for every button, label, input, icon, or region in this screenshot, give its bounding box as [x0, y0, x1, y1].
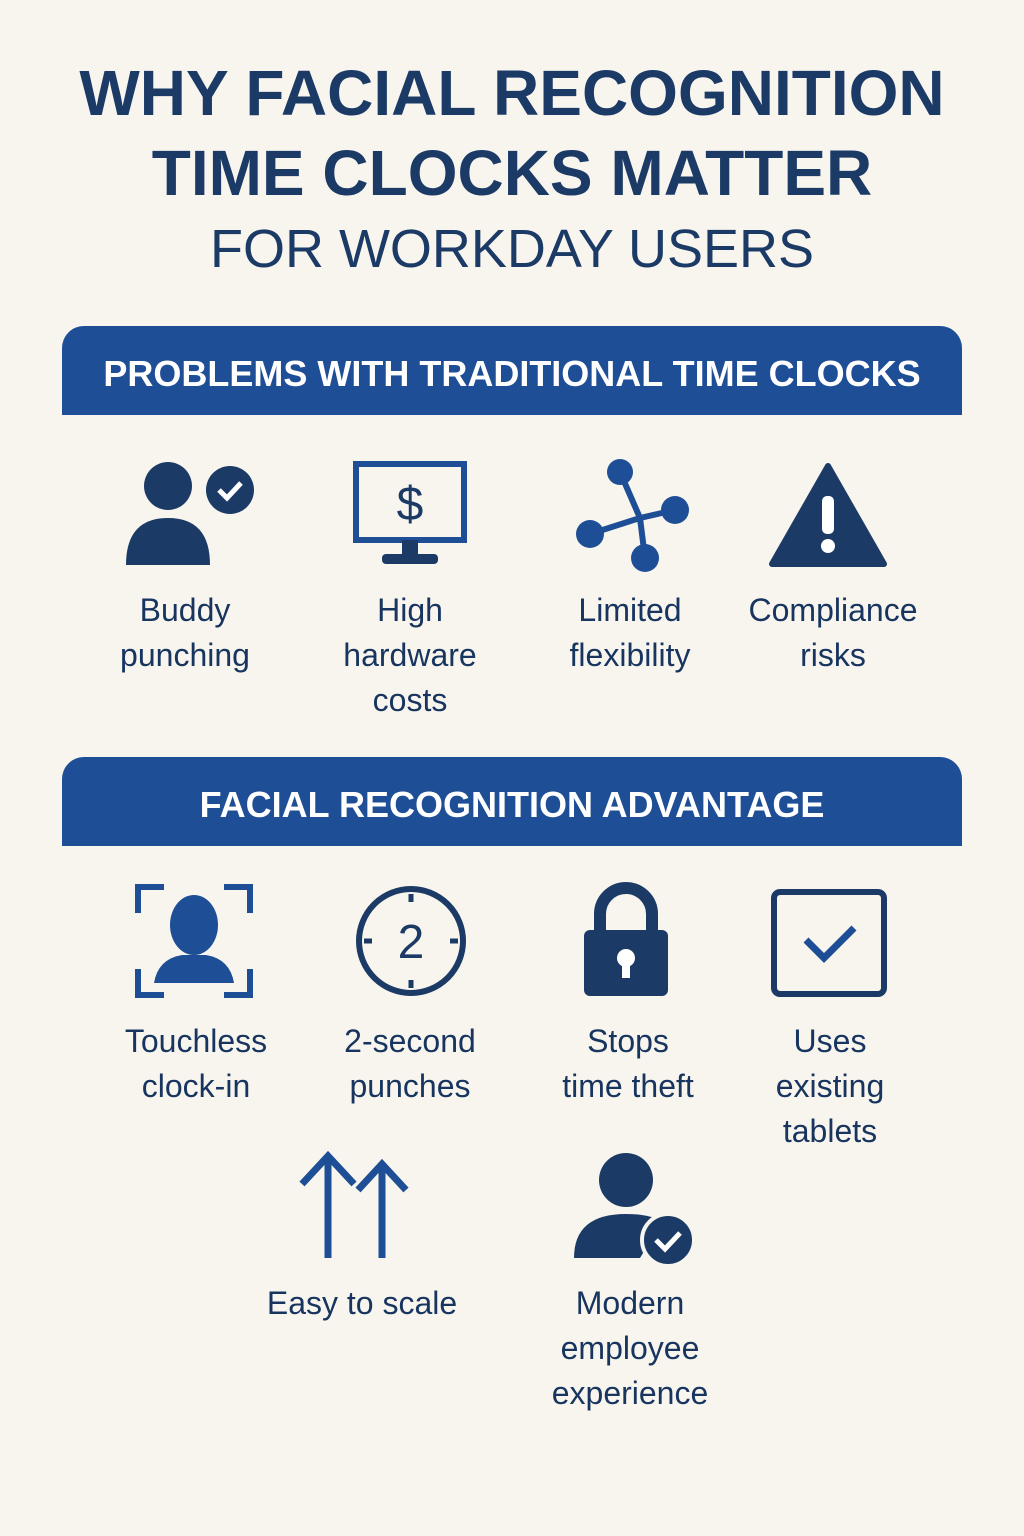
- icon: warning: [769, 463, 887, 567]
- label: existing tablets: existing: [776, 1068, 884, 1104]
- label: limited flexibility: [570, 592, 690, 673]
- label: time theft: Stops: [587, 1023, 669, 1059]
- label: 2-second: [344, 1023, 476, 1104]
- label: existing tablets: [776, 1023, 884, 1149]
- icon: checkbox: [771, 889, 887, 997]
- banner: advantage: [62, 757, 962, 846]
- label: time theft: time theft: [562, 1068, 694, 1104]
- banner: problems: [62, 326, 962, 415]
- label: 2-second: punches: [350, 1068, 470, 1104]
- label: 2-second: 2-second: [344, 1023, 476, 1059]
- icon: person check: [574, 1153, 692, 1264]
- title: TIME CLOCKS MATTER: [152, 137, 872, 209]
- label: existing tablets: Uses: [794, 1023, 866, 1059]
- label: buddy punching: Buddy: [140, 592, 230, 628]
- label: employee experience: experience: [552, 1375, 708, 1411]
- label: buddy punching: [120, 592, 250, 673]
- label: existing tablets: tablets: [783, 1113, 877, 1149]
- icon: timer: [356, 886, 466, 996]
- label: time theft: [562, 1023, 694, 1104]
- banner: problems: PROBLEMS WITH TRADITIONAL TIME CLOCKS: [103, 353, 921, 394]
- label: touchless: clock-in: [142, 1068, 250, 1104]
- icon: hardware costs: $: [397, 478, 423, 531]
- title: [79, 57, 945, 209]
- title: WHY FACIAL RECOGNITION: [79, 57, 945, 129]
- label: employee experience: employee: [561, 1330, 699, 1366]
- label: touchless: Touchless: [125, 1023, 267, 1059]
- label: hardware costs: [343, 592, 477, 718]
- label: compliance risks: [749, 592, 917, 673]
- label: hardware costs: costs: [373, 682, 447, 718]
- icon: flexibility: [576, 459, 689, 572]
- subtitle: FOR WORKDAY USERS: [210, 219, 814, 279]
- label: hardware costs: High: [377, 592, 443, 628]
- label: buddy punching: punching: [120, 637, 250, 673]
- banner: advantage: FACIAL RECOGNITION ADVANTAGE: [200, 784, 824, 825]
- label: compliance risks: Compliance: [749, 592, 917, 628]
- label: touchless: [125, 1023, 267, 1104]
- label: limited flexibility: Limited: [578, 592, 682, 628]
- label: compliance risks: risks: [800, 637, 866, 673]
- icon: timer: 2: [398, 916, 424, 969]
- icon: hardware costs: [353, 461, 467, 564]
- label: employee experience: Modern: [576, 1285, 684, 1321]
- label: hardware costs: hardware: [343, 637, 477, 673]
- icon: lock: [584, 882, 668, 996]
- icon: arrows up: [300, 1151, 408, 1258]
- label: employee experience: [552, 1285, 708, 1411]
- label: limited flexibility: flexibility: [570, 637, 690, 673]
- icon: buddy punching: [126, 462, 254, 565]
- label: easy to scale: Easy to scale: [267, 1285, 457, 1321]
- icon: face scan: [135, 884, 253, 998]
